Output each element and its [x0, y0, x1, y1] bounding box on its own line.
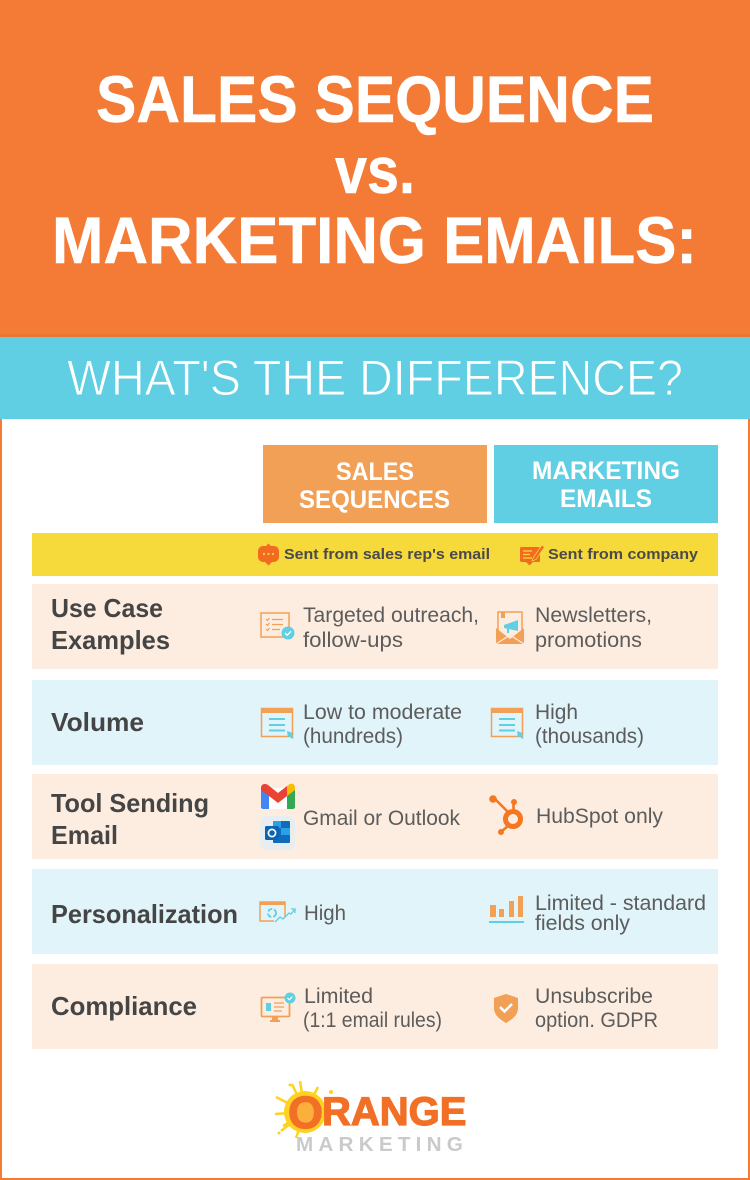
column heading: marketing emails [494, 445, 718, 523]
row: personalization: Personalization [51, 899, 238, 929]
column heading: marketing emails: EMAILS [560, 485, 652, 513]
row: compliance: Compliance [51, 991, 197, 1021]
row: use case examples: Newsletters, [535, 604, 652, 627]
logo: orange marketing [275, 1081, 468, 1156]
row: personalization: Limited - standard [535, 892, 706, 915]
icon: shield check [494, 994, 518, 1023]
row: use case examples [32, 584, 718, 669]
row: personalization: fields only [535, 912, 631, 935]
row: volume: Low to moderate [303, 701, 462, 724]
text: sent from sales rep: Sent from sales rep's email [284, 546, 490, 563]
subtitle band: WHAT'S THE DIFFERENCE? [67, 350, 683, 406]
text: sent from company: Sent from company [548, 546, 699, 563]
row: use case examples: Use Case [51, 593, 163, 623]
row: compliance: option. GDPR [535, 1009, 658, 1032]
icon: window list with cursor [491, 708, 524, 739]
icon: bar chart [489, 896, 524, 923]
column heading: marketing emails: MARKETING [532, 457, 680, 485]
icon: checklist [261, 613, 294, 640]
row: compliance: (1:1 email rules) [303, 1009, 442, 1032]
row: use case examples: promotions [535, 629, 642, 652]
row: tool sending email: Gmail or Outlook [303, 807, 460, 830]
row: use case examples: follow-ups [303, 629, 403, 652]
row: tool sending email: Email [51, 820, 118, 850]
icon: window list with cursor [261, 708, 294, 739]
row: use case examples: Examples [51, 625, 170, 655]
row: tool sending email [32, 774, 718, 859]
logo: orange marketing: MARKETING [296, 1134, 468, 1156]
logo: orange marketing: O [288, 1087, 323, 1138]
row: personalization [32, 869, 718, 954]
row: compliance: Unsubscribe [535, 985, 653, 1008]
row: volume: High [535, 701, 578, 724]
column heading: sales sequences: SALES [336, 458, 414, 486]
icon: message with pencil [520, 545, 544, 566]
row: volume: (thousands) [535, 725, 644, 748]
row: volume [32, 680, 718, 765]
row: compliance [32, 964, 718, 1049]
header: main title: SALES SEQUENCE [96, 62, 654, 136]
icon: sun splash [275, 1081, 333, 1138]
icon: gmail [261, 784, 295, 809]
icon: chat bubble [258, 544, 279, 566]
row: personalization: High [304, 902, 346, 925]
icon: newsletter envelope [496, 612, 524, 644]
subtitle band [0, 337, 750, 419]
row: compliance: Limited [304, 985, 373, 1008]
row: tool sending email: HubSpot only [536, 805, 663, 828]
row: tool sending email: Tool Sending [51, 788, 209, 818]
column heading: sales sequences: SEQUENCES [299, 486, 450, 514]
row: volume: (hundreds) [303, 725, 403, 748]
icon: monitor with check [262, 992, 296, 1022]
row: volume: Volume [51, 707, 144, 737]
header: main title [0, 0, 750, 337]
header: main title: vs. [335, 133, 415, 207]
row: use case examples: Targeted outreach, [303, 604, 479, 627]
icon: outlook [260, 816, 295, 850]
logo: orange marketing: RANGE [322, 1090, 466, 1134]
icon: hubspot [489, 795, 520, 835]
icon: window with rising trend [260, 902, 295, 922]
header: main title: MARKETING EMAILS: [52, 203, 697, 277]
sender row [32, 533, 718, 576]
column heading: sales sequences [263, 445, 487, 523]
